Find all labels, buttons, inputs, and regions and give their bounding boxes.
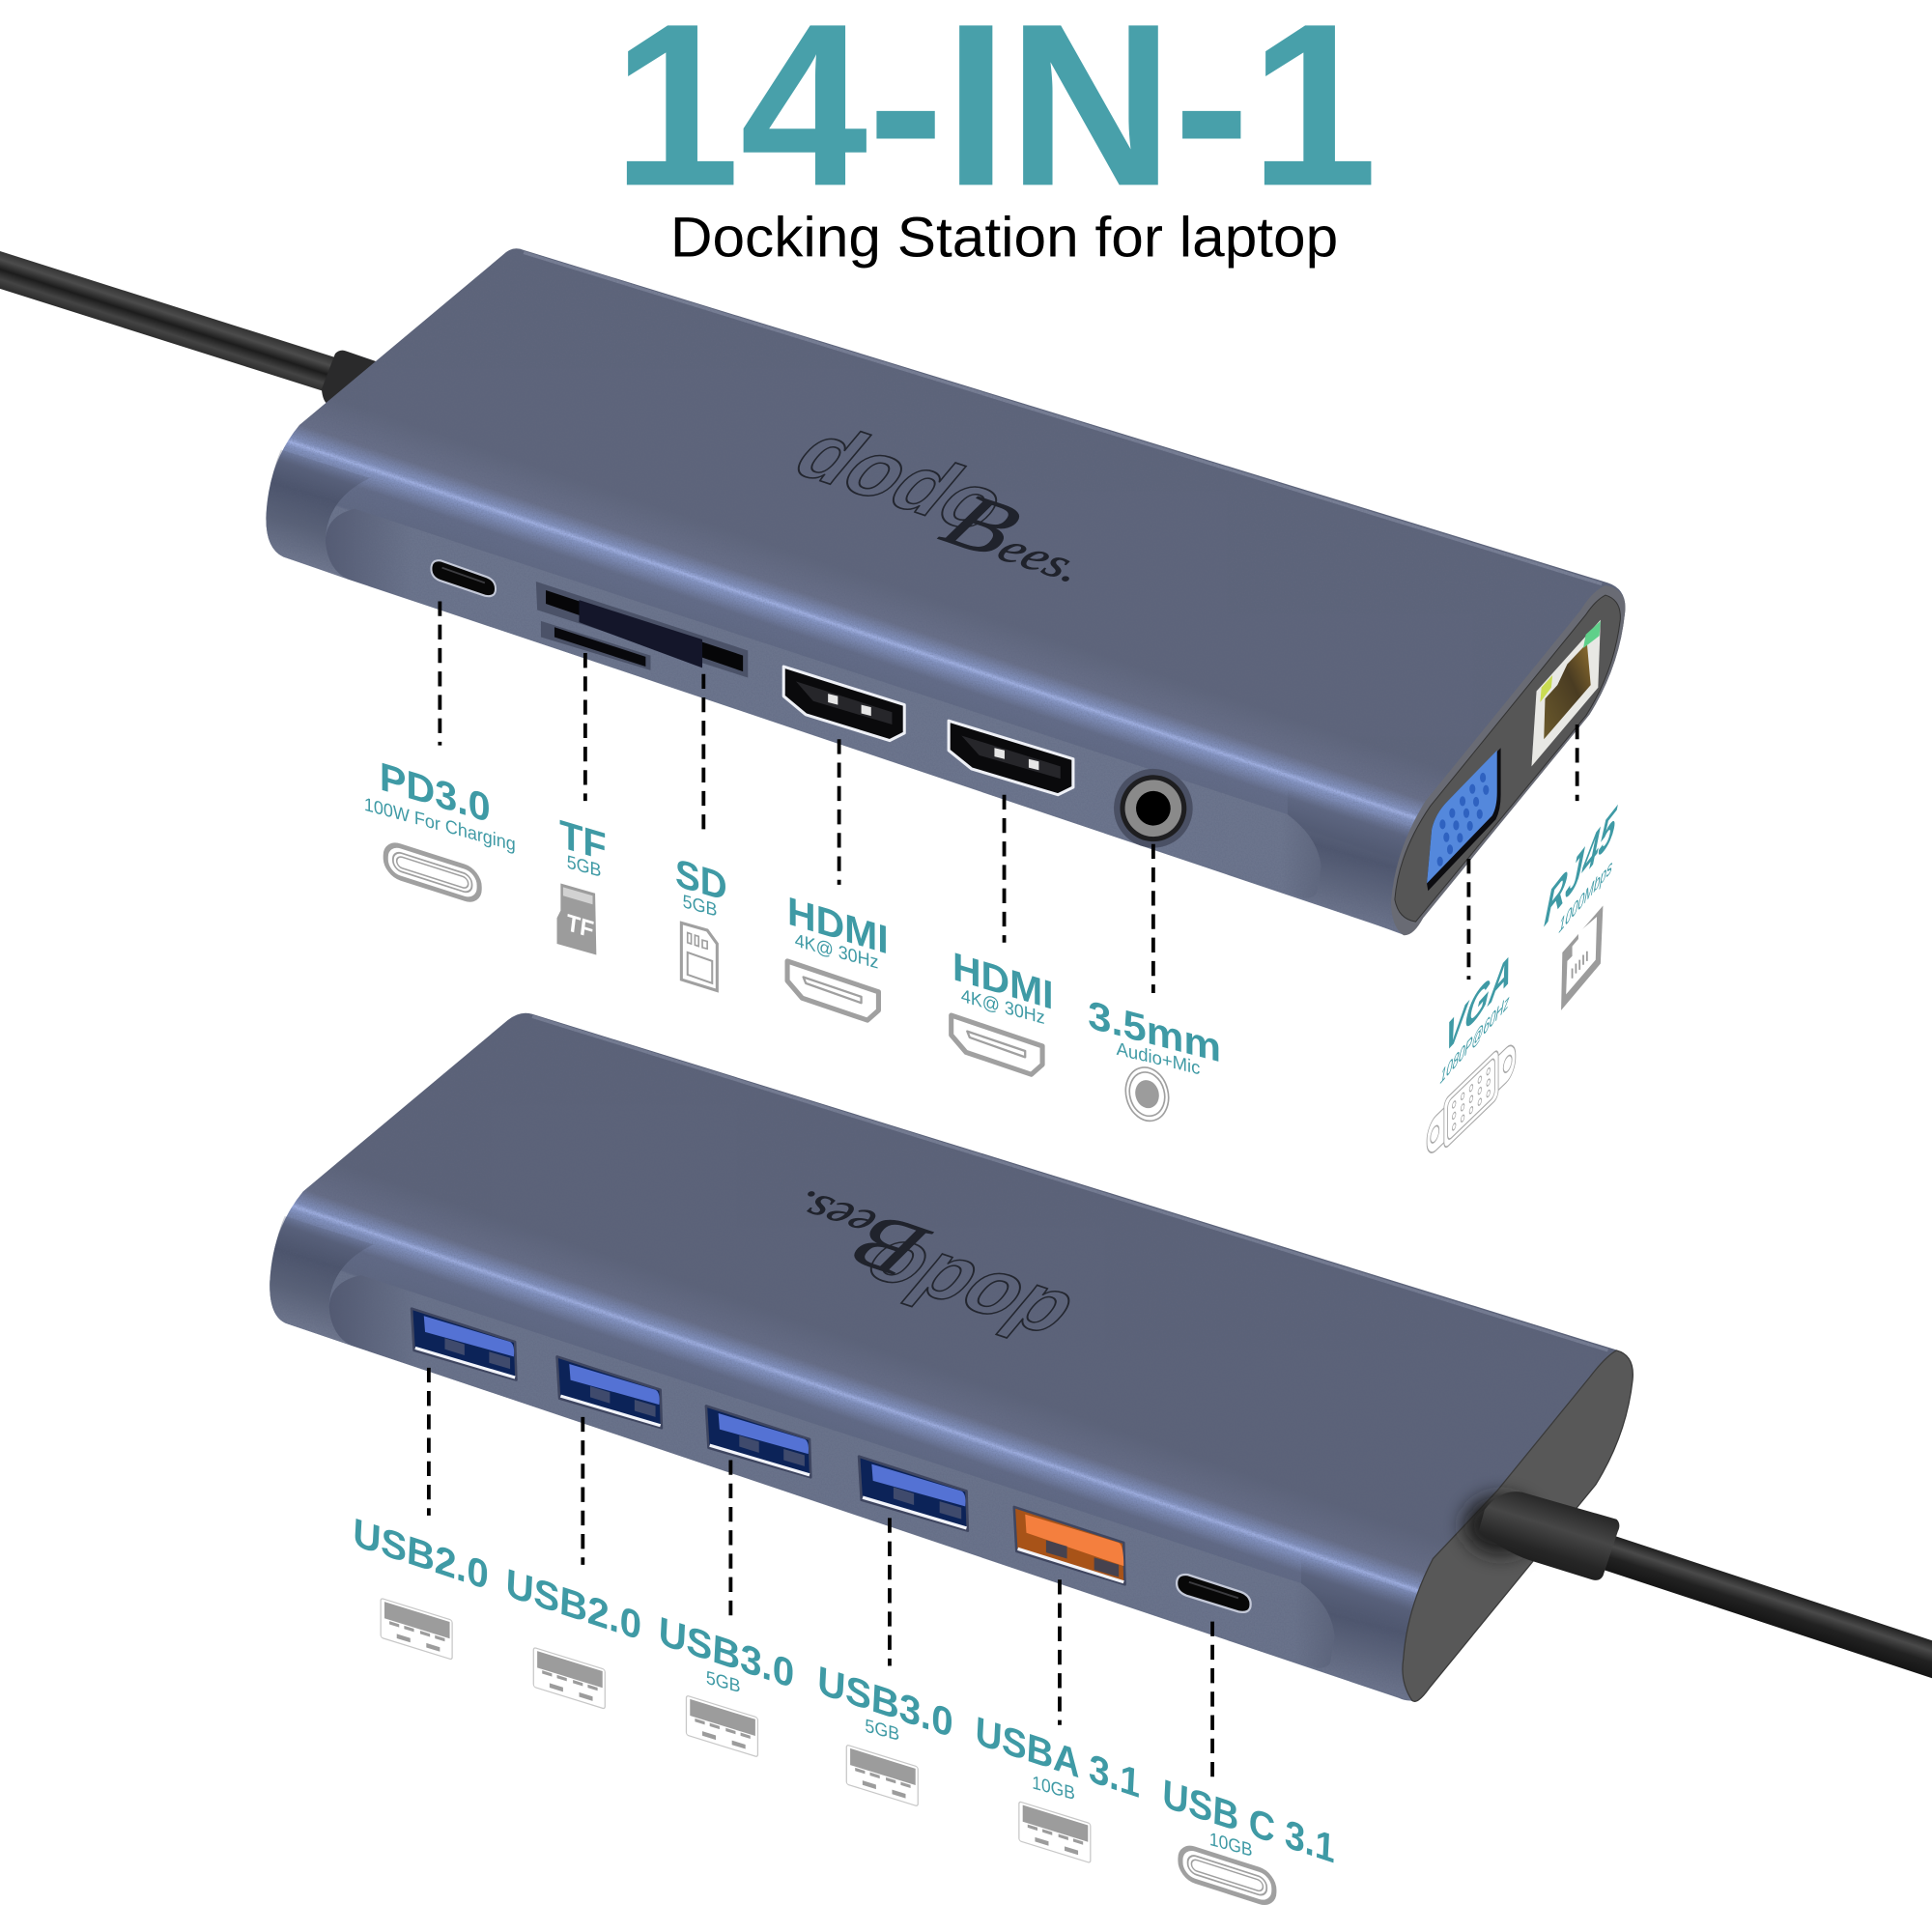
label: VGA: 1080P@60Hz (1438, 989, 1511, 1091)
icon: SD card (681, 923, 717, 991)
icon: USB-C lower (1180, 1844, 1274, 1906)
connector lines: upper ports (440, 601, 1577, 993)
port: SD slot (536, 582, 748, 678)
end face (1403, 1350, 1633, 1701)
icon: HDMI 1 (787, 961, 878, 1020)
icon: TF card: TF (565, 910, 595, 944)
label: 3.5mm: 3.5mm (1088, 991, 1221, 1070)
logo: dodoBees inverted (762, 1175, 1092, 1360)
end face rim (1391, 585, 1625, 935)
icon: USB-A second (533, 1647, 605, 1709)
subtitle: Docking Station for laptop (670, 206, 1338, 269)
left end cap shading (266, 450, 370, 579)
right end cap (1301, 1555, 1427, 1701)
label: HDMI 2: 4K@ 30Hz (961, 985, 1045, 1029)
label: USB3.0 second: USB3.0 (816, 1657, 954, 1746)
port: USB3.0 2 (859, 1457, 968, 1531)
label: RJ45: RJ45 (1540, 791, 1622, 942)
icon: HDMI 2 (952, 1015, 1042, 1074)
label: 3.5mm: Audio+Mic (1117, 1038, 1201, 1079)
port: USB3.0 1 (706, 1406, 810, 1477)
port: HDMI 1 (783, 667, 904, 741)
label: PD3.0: PD3.0 (380, 753, 491, 831)
cable: lower right (1463, 1492, 1932, 1662)
label: USB2.0 second: USB2.0 (505, 1560, 642, 1649)
label: TF: TF (559, 810, 607, 869)
icon: USB-A first (381, 1598, 452, 1660)
port: RJ45 (1531, 620, 1601, 766)
label: VGA (1438, 936, 1520, 1091)
hub body (266, 248, 1625, 933)
label: HDMI 1: HDMI (787, 888, 889, 962)
label: SD: SD (675, 850, 727, 910)
label: USB C 3.1: USB C 3.1 (1161, 1771, 1336, 1871)
front panel (326, 509, 1321, 898)
logo: dodoBees: Bees. (925, 476, 1116, 598)
label: USB C 3.1: 10GB (1209, 1829, 1253, 1861)
label: PD3.0 (364, 753, 516, 856)
port: TF slot (541, 621, 650, 670)
end face (1395, 595, 1620, 922)
port: USBA 3.1 (1014, 1507, 1125, 1584)
label: USBA 3.1: USBA 3.1 (974, 1708, 1142, 1806)
back edge highlight (524, 252, 1602, 584)
icon: RJ45 jack (1561, 906, 1603, 1010)
hub body (270, 1013, 1633, 1700)
logo: dodoBees: dodo (776, 409, 1029, 548)
metal grain (259, 246, 1633, 943)
logo: dodoBees inverted: dodo (838, 1222, 1092, 1360)
logo: dodoBees inverted: Bees. (762, 1175, 946, 1294)
logo: dodoBees (776, 409, 1116, 598)
label: USB3.0 first: 5GB (706, 1667, 741, 1697)
icon: USB-A fifth (1019, 1802, 1091, 1863)
label: RJ45 (1540, 791, 1622, 942)
label: RJ45: 1000Mbps (1557, 854, 1614, 940)
port: USB C 3.1 (1177, 1575, 1251, 1612)
cable: upper left (0, 268, 382, 404)
port: USB2.0 2 (557, 1356, 662, 1428)
port: VGA (1427, 748, 1501, 891)
icon: USB-A fourth (846, 1745, 918, 1806)
icon: TF card (557, 884, 596, 955)
icon: USB-C (385, 841, 479, 903)
metal grain (265, 1010, 1638, 1707)
label: HDMI 2: HDMI (952, 943, 1054, 1018)
icon: USB-A third (686, 1695, 757, 1757)
label: USB3.0 first: USB3.0 (658, 1607, 795, 1696)
label: TF: 5GB (567, 852, 601, 882)
label: USB2.0 first: USB2.0 (352, 1509, 490, 1598)
label: USB3.0 second: 5GB (865, 1716, 899, 1746)
icon: VGA connector (1427, 1032, 1516, 1167)
panel: upper docking station with cable (0, 246, 1633, 943)
port: USB2.0 1 (412, 1309, 516, 1380)
port: audio jack (1103, 757, 1204, 859)
back edge highlight (532, 1016, 1608, 1350)
label: VGA: VGA (1438, 936, 1520, 1068)
label: USBA 3.1: 10GB (1032, 1772, 1075, 1804)
connector lines: lower ports (429, 1368, 1212, 1776)
port: HDMI 2 (949, 721, 1073, 795)
front panel (329, 1275, 1334, 1668)
panel: lower docking station with cable (265, 1010, 1932, 1707)
label: SD: 5GB (683, 891, 717, 922)
port: USB-C PD3.0 (431, 560, 496, 596)
label: PD3.0: 100W For Charging (364, 794, 516, 856)
left end cap shading (270, 1216, 373, 1346)
icon: audio jack (1120, 1063, 1175, 1125)
label: HDMI 1: 4K@ 30Hz (795, 930, 878, 974)
right end cap (1288, 786, 1413, 935)
